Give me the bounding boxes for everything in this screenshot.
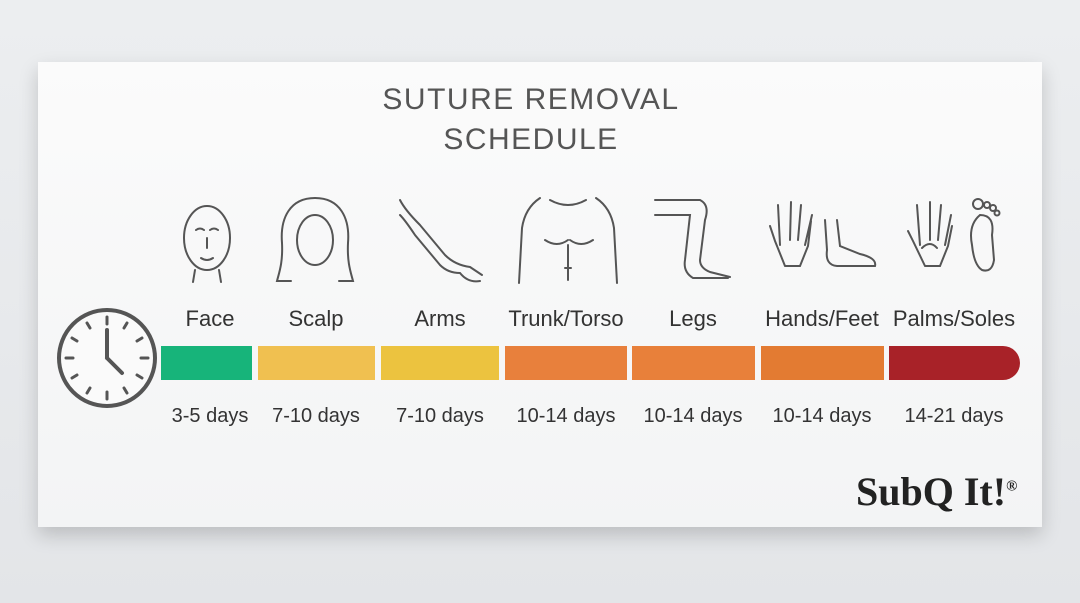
title <box>382 83 680 156</box>
icon: hand/foot <box>770 202 875 266</box>
icon: palm/sole <box>908 199 1000 271</box>
text: Face <box>186 306 234 331</box>
icon: scalp <box>277 198 353 281</box>
icon: arm <box>400 200 482 281</box>
title: SUTURE REMOVAL <box>382 83 680 116</box>
text: 3-5 days <box>172 405 248 427</box>
icon: clock <box>57 308 157 408</box>
text: 10-14 days <box>773 405 871 427</box>
text: 14-21 days <box>905 405 1003 427</box>
text: Trunk/Torso <box>508 306 624 331</box>
icon: face <box>184 206 230 282</box>
text: 7-10 days <box>272 405 360 427</box>
text: 10-14 days <box>644 405 742 427</box>
logo: SubQ It!® <box>856 469 1017 514</box>
labels <box>186 306 1015 331</box>
timeline bars <box>161 346 1020 380</box>
durations <box>172 405 1003 427</box>
icon: torso <box>519 198 617 283</box>
title: SCHEDULE <box>443 123 619 156</box>
text: Palms/Soles <box>893 306 1015 331</box>
text: 7-10 days <box>396 405 484 427</box>
text: 10-14 days <box>517 405 615 427</box>
icon: leg <box>655 200 730 278</box>
text: Scalp <box>288 306 344 331</box>
text: Hands/Feet <box>765 306 879 331</box>
text: Legs <box>669 306 717 331</box>
text: Arms <box>414 306 466 331</box>
card <box>38 62 1042 527</box>
